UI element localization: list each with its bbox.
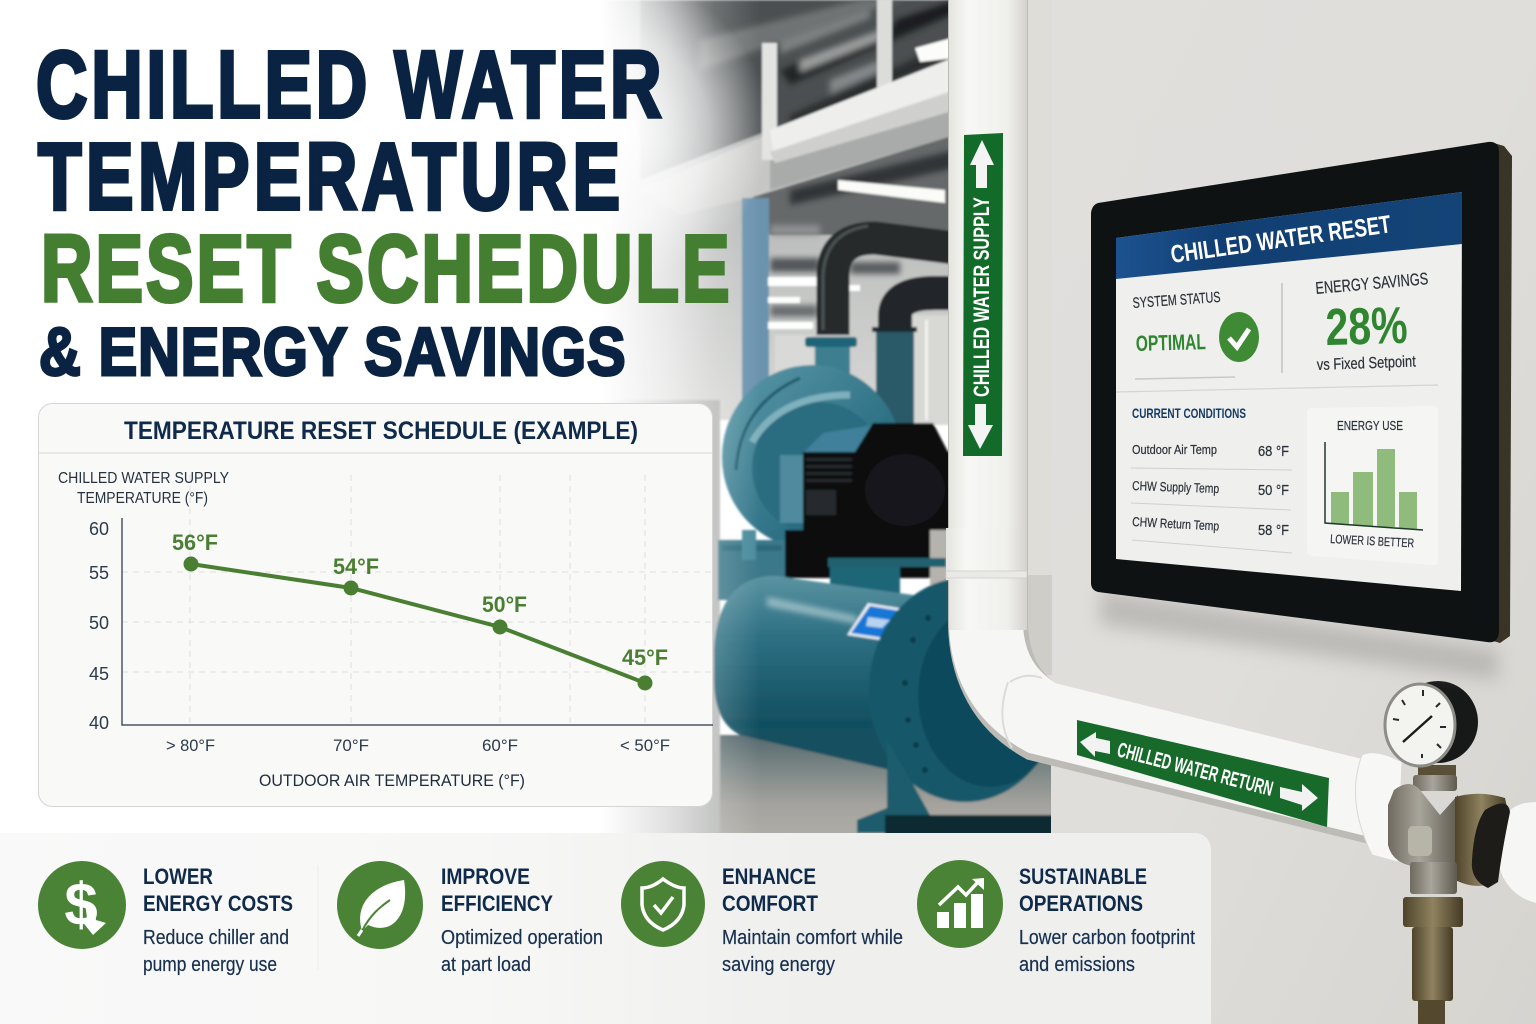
data labels: 56°F [172,530,218,555]
benefit: improve efficiency [337,861,603,976]
description: pump energy use [143,954,277,976]
arrow up [970,140,994,188]
benefit: enhance comfort [621,861,903,976]
screen [1116,192,1462,591]
screen header [1116,192,1462,279]
pressure gauge and valve [1385,681,1510,1024]
row: chw supply temp: CHW Supply Temp [1132,478,1219,496]
title: RESET SCHEDULE [41,215,730,321]
arrow left [1080,732,1110,757]
screen title: CHILLED WATER RESET [1169,210,1393,269]
row: chw return temp: CHW Return Temp [1132,514,1220,534]
energy savings label: ENERGY SAVINGS [1315,269,1429,298]
heading: ENHANCE [722,864,816,889]
description: Optimized operation [441,927,603,949]
left white fade over photo [0,0,760,840]
description: saving energy [722,954,835,976]
wall monitor [1091,142,1512,643]
x-axis ticks: 70°F [333,736,369,755]
x-axis ticks [166,736,670,755]
energy use card [1307,406,1438,565]
row: outdoor air temp [1132,442,1289,460]
icon: shield with check [621,861,705,947]
arrow right [1280,784,1318,811]
optimal status: OPTIMAL [1135,329,1206,356]
description: Reduce chiller and [143,927,289,949]
valve body [1388,765,1510,1024]
heading [143,864,293,916]
lower is better: LOWER IS BETTER [1330,532,1414,550]
y-axis ticks [89,519,109,733]
x-axis ticks: 60°F [482,736,518,755]
data labels [172,530,668,670]
panel: temperature reset schedule chart [38,404,713,806]
heading: EFFICIENCY [441,891,553,916]
card title: ENERGY USE [1337,418,1403,433]
heading: IMPROVE [441,864,530,889]
axes [122,518,713,725]
benefit: sustainable operations [917,860,1195,976]
pipe label: chilled water return [1077,720,1329,827]
status check icon [1219,312,1259,362]
description: and emissions [1019,954,1135,976]
row: outdoor air temp: Outdoor Air Temp [1132,442,1217,457]
pipe collar [946,528,1027,580]
y-axis ticks: 40 [89,713,109,733]
description [722,927,903,976]
y-axis title: TEMPERATURE (°F) [77,490,208,507]
heading: LOWER [143,864,213,889]
wall pipe behind [1025,0,1052,680]
description: Maintain comfort while [722,927,903,949]
monitor bezel [1091,142,1499,642]
wall [1051,0,1536,1024]
y-axis ticks: 50 [89,613,109,633]
return label text: CHILLED WATER RETURN [1115,739,1275,801]
heading: OPERATIONS [1019,891,1143,916]
line series [184,556,652,690]
monitor shadow [1100,590,1498,680]
heading: ENERGY COSTS [143,891,293,916]
supply label text: CHILLED WATER SUPPLY [969,197,994,397]
background: mechanical room photo scene [590,0,1062,840]
heading [1019,864,1147,916]
title: CHILLED WATER [36,31,662,137]
data labels: 54°F [333,554,379,579]
row: outdoor air temp: 68 °F [1258,443,1289,460]
pipe label: chilled water supply [963,133,1003,456]
y-axis title [58,470,229,507]
arrow down [968,404,993,449]
title: TEMPERATURE [38,123,620,229]
heading: COMFORT [722,891,818,916]
y-axis ticks: 60 [89,519,109,539]
x-axis title: OUTDOOR AIR TEMPERATURE (°F) [259,771,525,790]
heading: SUSTAINABLE [1019,864,1147,889]
panel: benefits strip [0,833,1211,1024]
return pipe collar [1355,753,1402,862]
heading [441,864,553,916]
heading [722,864,818,916]
icon: dollar with down arrow [38,861,126,949]
return pipe socket at elbow [1002,676,1042,748]
title: & ENERGY SAVINGS [39,315,626,390]
title [36,31,730,390]
y-axis ticks: 55 [89,563,109,583]
benefit: lower energy costs [38,861,293,976]
system status label: SYSTEM STATUS [1132,289,1221,312]
data labels: 50°F [482,592,527,617]
chart heading: TEMPERATURE RESET SCHEDULE (EXAMPLE) [124,417,638,445]
gauge ticks [1393,690,1446,758]
description [1019,927,1195,976]
gauge needle [1403,716,1432,742]
row: chw return temp: 58 °F [1258,522,1289,539]
top fade over ceiling [600,0,770,280]
gauge housing [1398,681,1478,763]
description: Lower carbon footprint [1019,927,1195,949]
vs fixed setpoint: vs Fixed Setpoint [1317,354,1417,374]
bar chart [1325,442,1423,530]
row: chw supply temp [1132,478,1289,499]
gauge face [1385,684,1455,766]
icon: leaf [337,861,423,949]
savings value: 28% [1325,297,1408,357]
description [441,927,603,976]
right pipe stub [1497,802,1536,903]
x-axis ticks: < 50°F [620,736,670,755]
description [143,927,289,976]
icon: growth chart [917,860,1003,948]
x-axis ticks: > 80°F [166,736,215,755]
row: chw return temp [1132,514,1289,539]
data labels: 45°F [622,645,668,670]
current conditions heading: CURRENT CONDITIONS [1132,405,1246,421]
supply pipe with elbow into return pipe [946,0,1536,903]
y-axis ticks: 45 [89,664,109,684]
y-axis title: CHILLED WATER SUPPLY [58,470,229,487]
description: at part load [441,954,531,976]
row: chw supply temp: 50 °F [1258,482,1289,499]
icon: dollar with down arrow: $ [64,871,98,938]
